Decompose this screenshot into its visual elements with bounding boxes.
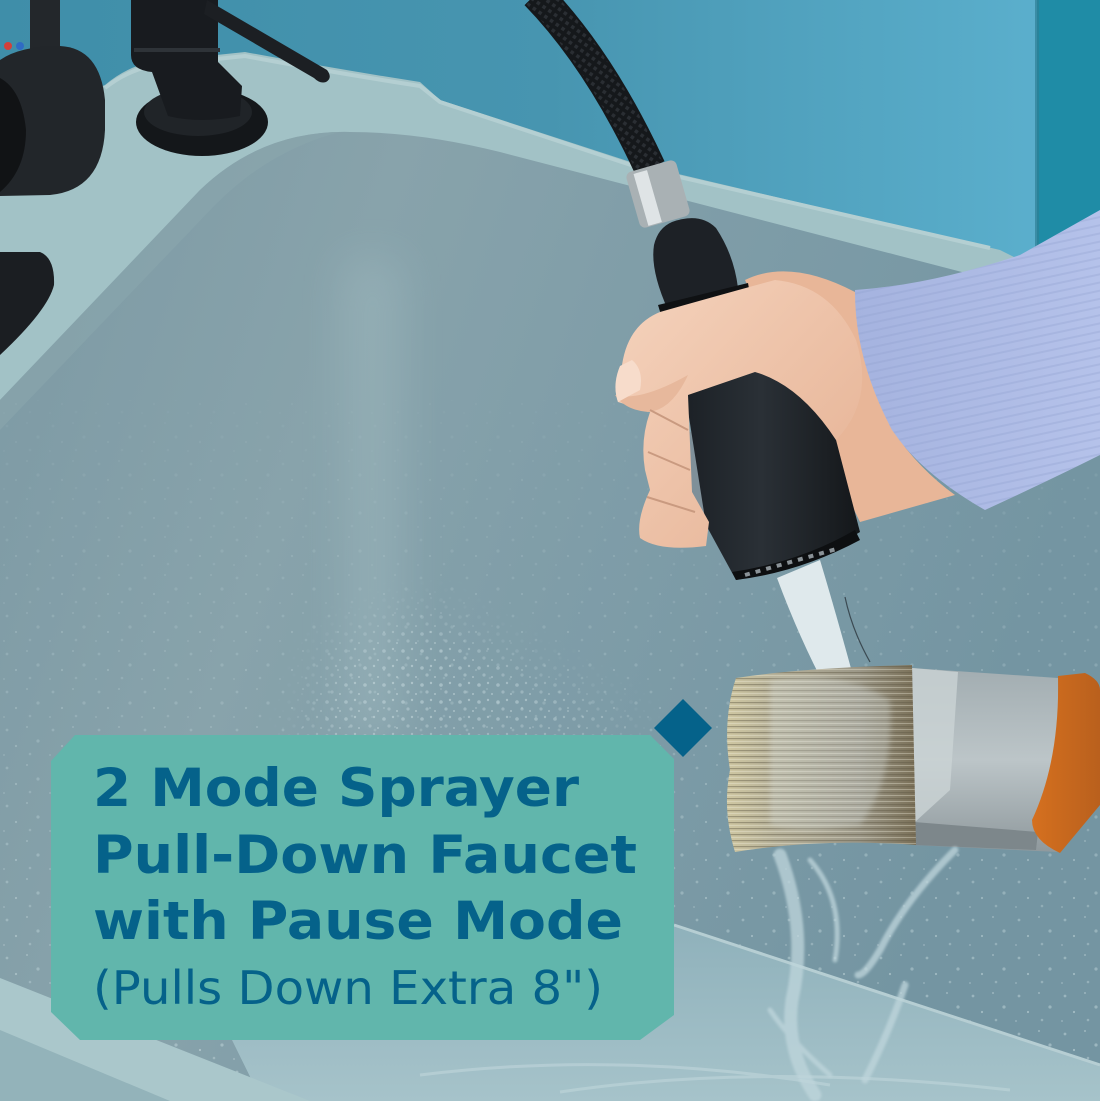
sleeve xyxy=(855,210,1100,510)
subheading: pull length: (Pulls Down Extra 8") xyxy=(93,961,603,1015)
diamond marker xyxy=(654,699,712,757)
faucet hose xyxy=(536,0,650,168)
background wall xyxy=(0,0,1100,300)
paint brush xyxy=(727,665,1100,853)
heading: line three: with Pause Mode xyxy=(93,891,623,952)
sprayer head xyxy=(625,159,860,580)
water pool xyxy=(232,925,1100,1101)
heading: line two: Pull-Down Faucet xyxy=(93,825,637,886)
hand back and wrist xyxy=(745,271,955,522)
icon: soap dispenser xyxy=(131,0,330,156)
front sink rim xyxy=(0,978,310,1101)
icon: mount plate xyxy=(0,252,54,355)
water stream xyxy=(777,560,870,692)
icon: faucet body xyxy=(0,0,105,196)
water splash xyxy=(770,850,955,1095)
sink rim xyxy=(0,52,1100,520)
hand fingers and thumb xyxy=(615,280,862,548)
callout panel xyxy=(51,735,674,1040)
heading: product title: 2 Mode Sprayer xyxy=(93,758,579,819)
